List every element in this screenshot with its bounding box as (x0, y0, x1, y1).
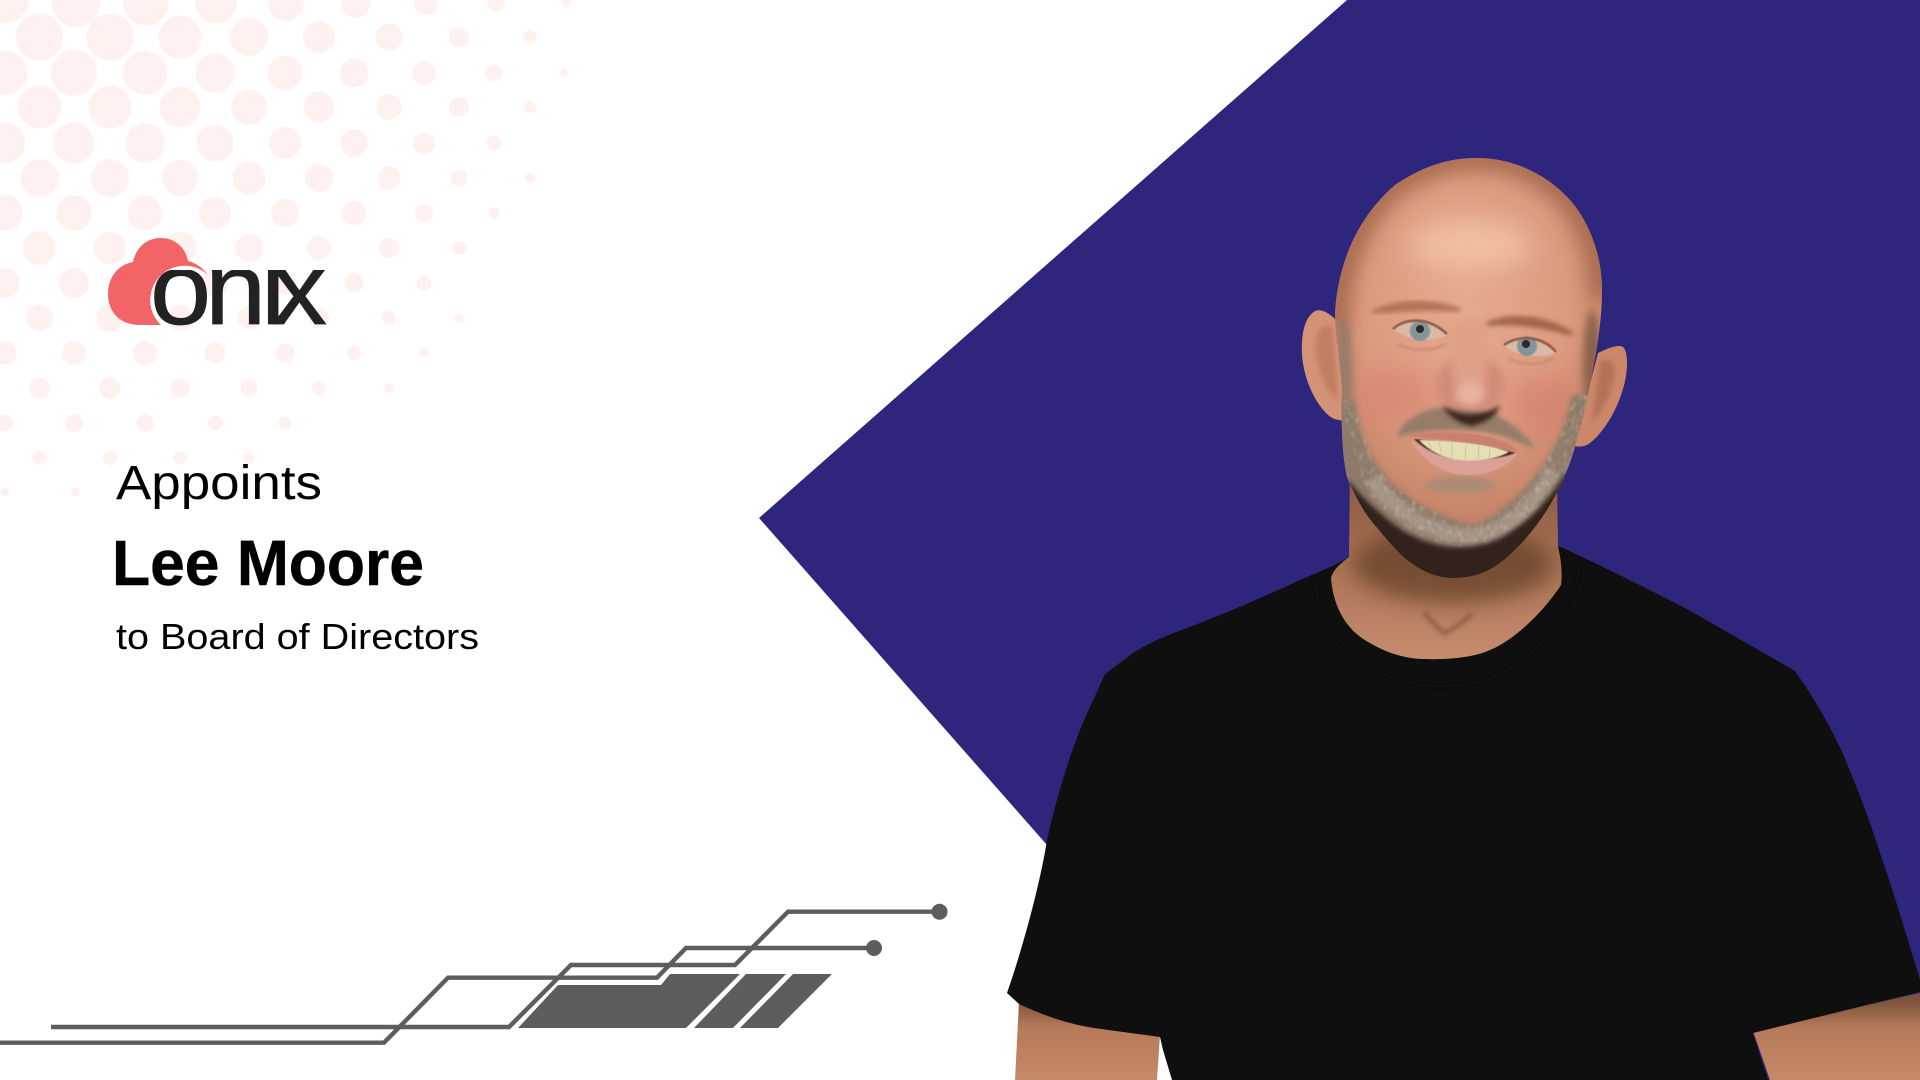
nose (1436, 360, 1504, 411)
left eyebrow (1373, 303, 1460, 312)
right eyebrow (1487, 318, 1572, 334)
collar rib (1314, 570, 1580, 686)
upper circuit line with end dot (51, 904, 948, 1027)
soul patch (1425, 476, 1495, 494)
left ear (1302, 310, 1346, 420)
upper lip (1408, 432, 1518, 453)
cheek flush left (1366, 368, 1429, 418)
nostril shadow (1442, 405, 1500, 426)
beard lighter band (1372, 470, 1553, 536)
moustache (1397, 408, 1535, 449)
portrait of Lee Moore (1007, 158, 1920, 1080)
head (1335, 158, 1602, 578)
logo wordmark: onix (150, 232, 327, 346)
beard dark under-jaw band (1348, 470, 1566, 578)
temple shade left (1335, 317, 1353, 433)
mouth opening (1414, 439, 1515, 460)
line: Appoints: Appoints (116, 457, 322, 510)
forehead highlight (1408, 219, 1532, 271)
slanted block bars (518, 974, 832, 1028)
chin shadow on neck (1353, 527, 1553, 603)
neck (1331, 465, 1562, 659)
left eye (1393, 321, 1447, 350)
beard (1335, 395, 1595, 590)
skull edge shading (1335, 158, 1602, 330)
circuit line graphic (0, 904, 948, 1043)
right arm (1753, 993, 1920, 1080)
teeth (1419, 440, 1509, 461)
lower lip (1411, 440, 1518, 475)
lower circuit line with end dot (0, 940, 882, 1043)
facial features (1335, 158, 1602, 590)
neck crease (1424, 612, 1472, 633)
halftone dot pattern (0, 0, 571, 496)
black t-shirt (1007, 547, 1920, 1080)
beard grey speckle (1340, 395, 1595, 548)
cheek flush right (1512, 377, 1570, 428)
text block: announcement (112, 457, 479, 657)
right eye (1504, 336, 1556, 364)
beard ring base (1338, 395, 1595, 590)
logo cloud icon (108, 238, 208, 325)
right ear (1574, 346, 1627, 447)
navy diamond background shape (759, 0, 1920, 1080)
onix logo (108, 238, 326, 326)
left arm (1015, 1002, 1160, 1080)
line: Lee Moore: Lee Moore (112, 527, 424, 599)
temple shade right (1583, 310, 1601, 420)
line: to Board of Directors: to Board of Directors (116, 616, 479, 657)
